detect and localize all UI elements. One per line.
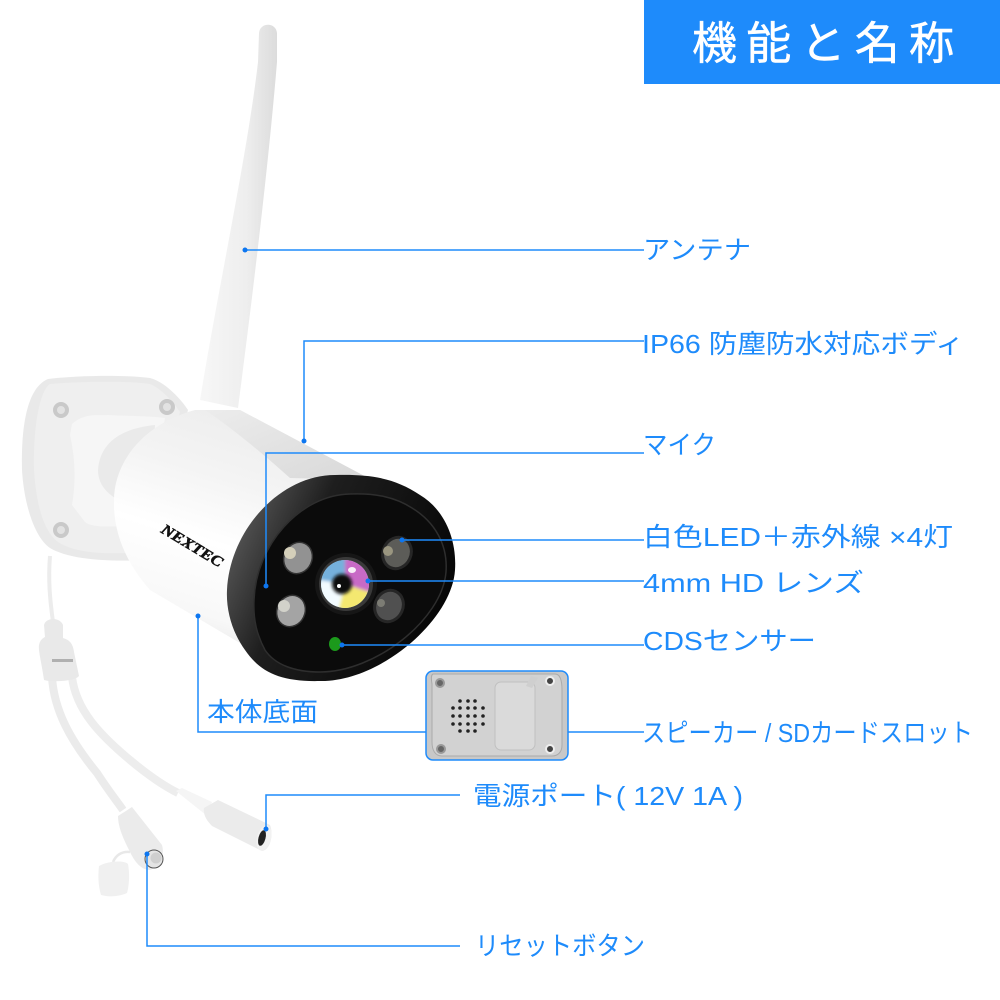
icon: LED bottom right xyxy=(370,586,408,626)
icon: antenna xyxy=(200,25,277,408)
callout: CDS sensor xyxy=(340,626,816,656)
camera front rim xyxy=(227,475,455,681)
speaker holes xyxy=(451,699,485,733)
SD slot cover xyxy=(495,682,535,750)
callout: white LED and infrared xyxy=(400,522,953,552)
header banner xyxy=(644,0,1000,84)
icon: lens xyxy=(315,553,377,615)
panel: speaker and SD slot inset xyxy=(426,671,568,760)
icon: reset cable xyxy=(52,677,123,810)
callout: microphone: マイク xyxy=(643,430,716,460)
icon: power jack xyxy=(176,788,274,852)
screws xyxy=(436,677,554,753)
callout: IP66 body: IP66 防塵防水対応ボディ xyxy=(642,329,964,359)
camera illustration xyxy=(22,25,455,896)
header title: 機能と名称 xyxy=(692,18,954,69)
callout: bottom of body: 本体底面 xyxy=(207,697,318,727)
callout: CDS sensor: CDSセンサー xyxy=(643,626,816,656)
callout: lens xyxy=(366,568,864,598)
callout: power port xyxy=(264,781,743,832)
icon: camera body xyxy=(114,410,372,660)
body top highlight band xyxy=(205,410,372,480)
callout: antenna xyxy=(242,235,751,265)
callout: bottom of body xyxy=(196,614,426,732)
icon: mount cable xyxy=(49,556,53,622)
icon: LED top left xyxy=(279,538,317,578)
icon: LED bottom left xyxy=(272,591,310,631)
icon: reset connector xyxy=(98,807,163,896)
camera front face xyxy=(254,494,446,672)
callout: power port: 電源ポート( 12V 1A ) xyxy=(473,781,743,811)
logo: NEXTEC xyxy=(157,521,226,572)
callout: microphone xyxy=(264,430,716,588)
callout: antenna: アンテナ xyxy=(643,235,751,265)
icon: cable connector xyxy=(39,619,79,681)
callout: reset button: リセットボタン xyxy=(475,931,645,961)
icon: power cable xyxy=(72,677,178,793)
callout: reset button xyxy=(144,852,645,961)
icon: CDS sensor xyxy=(329,637,341,651)
icon: LED top right xyxy=(378,533,416,573)
icon: wall mount plate xyxy=(22,376,188,561)
callout: IP66 body xyxy=(302,329,964,444)
callout: lens: 4mm HD レンズ xyxy=(643,568,864,598)
callout: white LED and infrared: 白色LED＋赤外線 ×4灯 xyxy=(643,522,953,552)
